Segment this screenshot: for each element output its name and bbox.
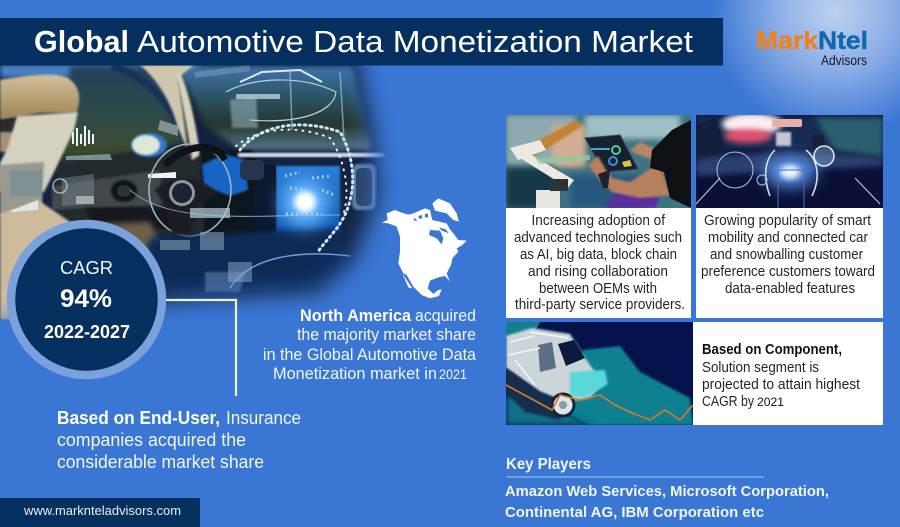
end-user text: Insurance: [226, 408, 301, 428]
CAGR badge: [11, 224, 162, 375]
panel: smart mobility: [696, 113, 883, 318]
website: www.marknteladvisors.com: [23, 503, 181, 518]
title text: Automotive Data Monetization Market: [137, 24, 693, 59]
text block: and snowballing customer: [710, 247, 863, 263]
end-user text: considerable market share: [57, 452, 264, 472]
text block: mobility and connected car: [708, 230, 868, 246]
panel: component segment: [506, 322, 883, 425]
text block: advanced technologies such: [514, 230, 682, 246]
end-user text: companies acquired the: [57, 430, 246, 450]
key players: Key Players: [506, 456, 591, 473]
panel: technology adoption: [506, 115, 691, 318]
hero photo: connected car cockpit: [0, 60, 400, 320]
North America text: North America: [300, 307, 412, 325]
logo: MarkNtel Advisors: Mark: [756, 27, 818, 55]
photo: connected car dashboard: [696, 113, 883, 208]
logo glow: [700, 0, 900, 140]
text block: projected to attain highest: [702, 377, 860, 393]
text block: between OEMs with: [539, 281, 657, 297]
text block: Growing popularity of smart: [704, 213, 871, 229]
text block: Solution segment is: [702, 360, 819, 376]
text block: data-enabled features: [725, 281, 855, 297]
North America text: [263, 307, 477, 383]
photo: robot arm and tablet: [506, 115, 691, 208]
text block: 2021: [757, 395, 784, 409]
logo: MarkNtel Advisors: Ntel: [818, 27, 868, 55]
North America text: Monetization market in: [273, 365, 437, 383]
North America text: 2021: [439, 367, 467, 382]
end-user text: [57, 408, 301, 472]
connector line: [157, 300, 236, 396]
icon: North America map: [382, 198, 467, 298]
logo: MarkNtel Advisors: Advisors: [821, 53, 867, 68]
North America text: in the Global Automotive Data: [263, 346, 477, 364]
North America text: the majority market share: [297, 326, 476, 344]
CAGR value: 94%: [60, 285, 112, 313]
text block: [696, 208, 883, 318]
CAGR label: CAGR: [60, 258, 113, 278]
end-user text: Based on End-User,: [57, 408, 220, 428]
key players: Amazon Web Services, Microsoft Corporation,: [505, 483, 829, 500]
CAGR period: 2022-2027: [44, 322, 130, 342]
text block: Based on Component,: [702, 342, 842, 358]
text block: [693, 322, 883, 425]
photo: car frame with data: [506, 322, 693, 425]
footer bar: [0, 498, 200, 527]
text block: and rising collaboration: [528, 264, 668, 280]
key players: [505, 456, 829, 521]
text block: as AI, big data, block chain: [520, 247, 677, 263]
title text: Global: [34, 24, 129, 59]
title bar: [0, 18, 723, 66]
text block: CAGR by: [702, 394, 755, 410]
text block: third-party service providers.: [515, 297, 685, 313]
logo: MarkNtel Advisors: [756, 27, 868, 68]
key players: Continental AG, IBM Corporation etc: [505, 504, 764, 521]
text block: preference customers toward: [701, 264, 875, 280]
North America text: acquired: [415, 307, 476, 325]
text block: Increasing adoption of: [532, 213, 666, 229]
text block: [506, 208, 691, 318]
